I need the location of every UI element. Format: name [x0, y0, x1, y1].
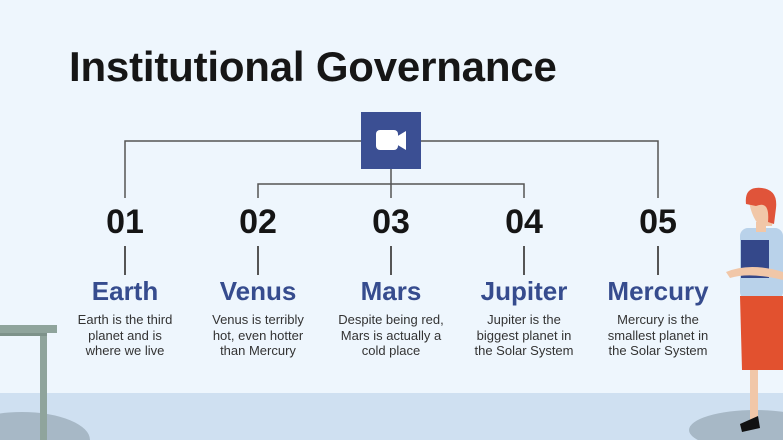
- item 04: [474, 203, 574, 358]
- icon: video camera: [361, 112, 421, 169]
- item 05: 05: [639, 203, 677, 241]
- item 04: 04: [505, 203, 543, 241]
- floor: [0, 393, 783, 440]
- item 01: where we live: [86, 343, 164, 358]
- item 05: Mercury: [607, 276, 709, 306]
- item 02: [212, 203, 304, 358]
- item 05: the Solar System: [608, 343, 708, 358]
- table: [0, 325, 57, 440]
- item 02: Venus is terribly: [212, 312, 304, 327]
- item 02: hot, even hotter: [213, 328, 303, 342]
- title: Institutional Governance: [69, 43, 557, 90]
- item 03: [338, 203, 444, 358]
- item 03: Despite being red,: [338, 312, 444, 327]
- item 03: Mars is actually a: [341, 328, 441, 342]
- item 05: [607, 203, 709, 358]
- item 04: Jupiter: [481, 276, 567, 306]
- item 04: Jupiter is the: [487, 312, 561, 327]
- item 04: biggest planet in: [477, 328, 571, 342]
- floor shadow left: [0, 412, 90, 440]
- item 02: Venus: [220, 276, 296, 306]
- item 05: Mercury is the: [617, 312, 699, 327]
- item 02: 02: [239, 203, 277, 241]
- item 01: 01: [106, 203, 144, 241]
- item 05: smallest planet in: [608, 328, 708, 342]
- item 03: 03: [372, 203, 410, 241]
- item 04: the Solar System: [474, 343, 574, 358]
- item 01: planet and is: [88, 328, 162, 342]
- item 02: than Mercury: [220, 343, 296, 358]
- item 01: Earth is the third: [78, 312, 172, 327]
- item 01: Earth: [92, 276, 158, 306]
- item 01: [78, 203, 172, 358]
- item 03: Mars: [361, 276, 421, 306]
- item 03: cold place: [362, 343, 420, 358]
- woman illustration: [689, 188, 783, 440]
